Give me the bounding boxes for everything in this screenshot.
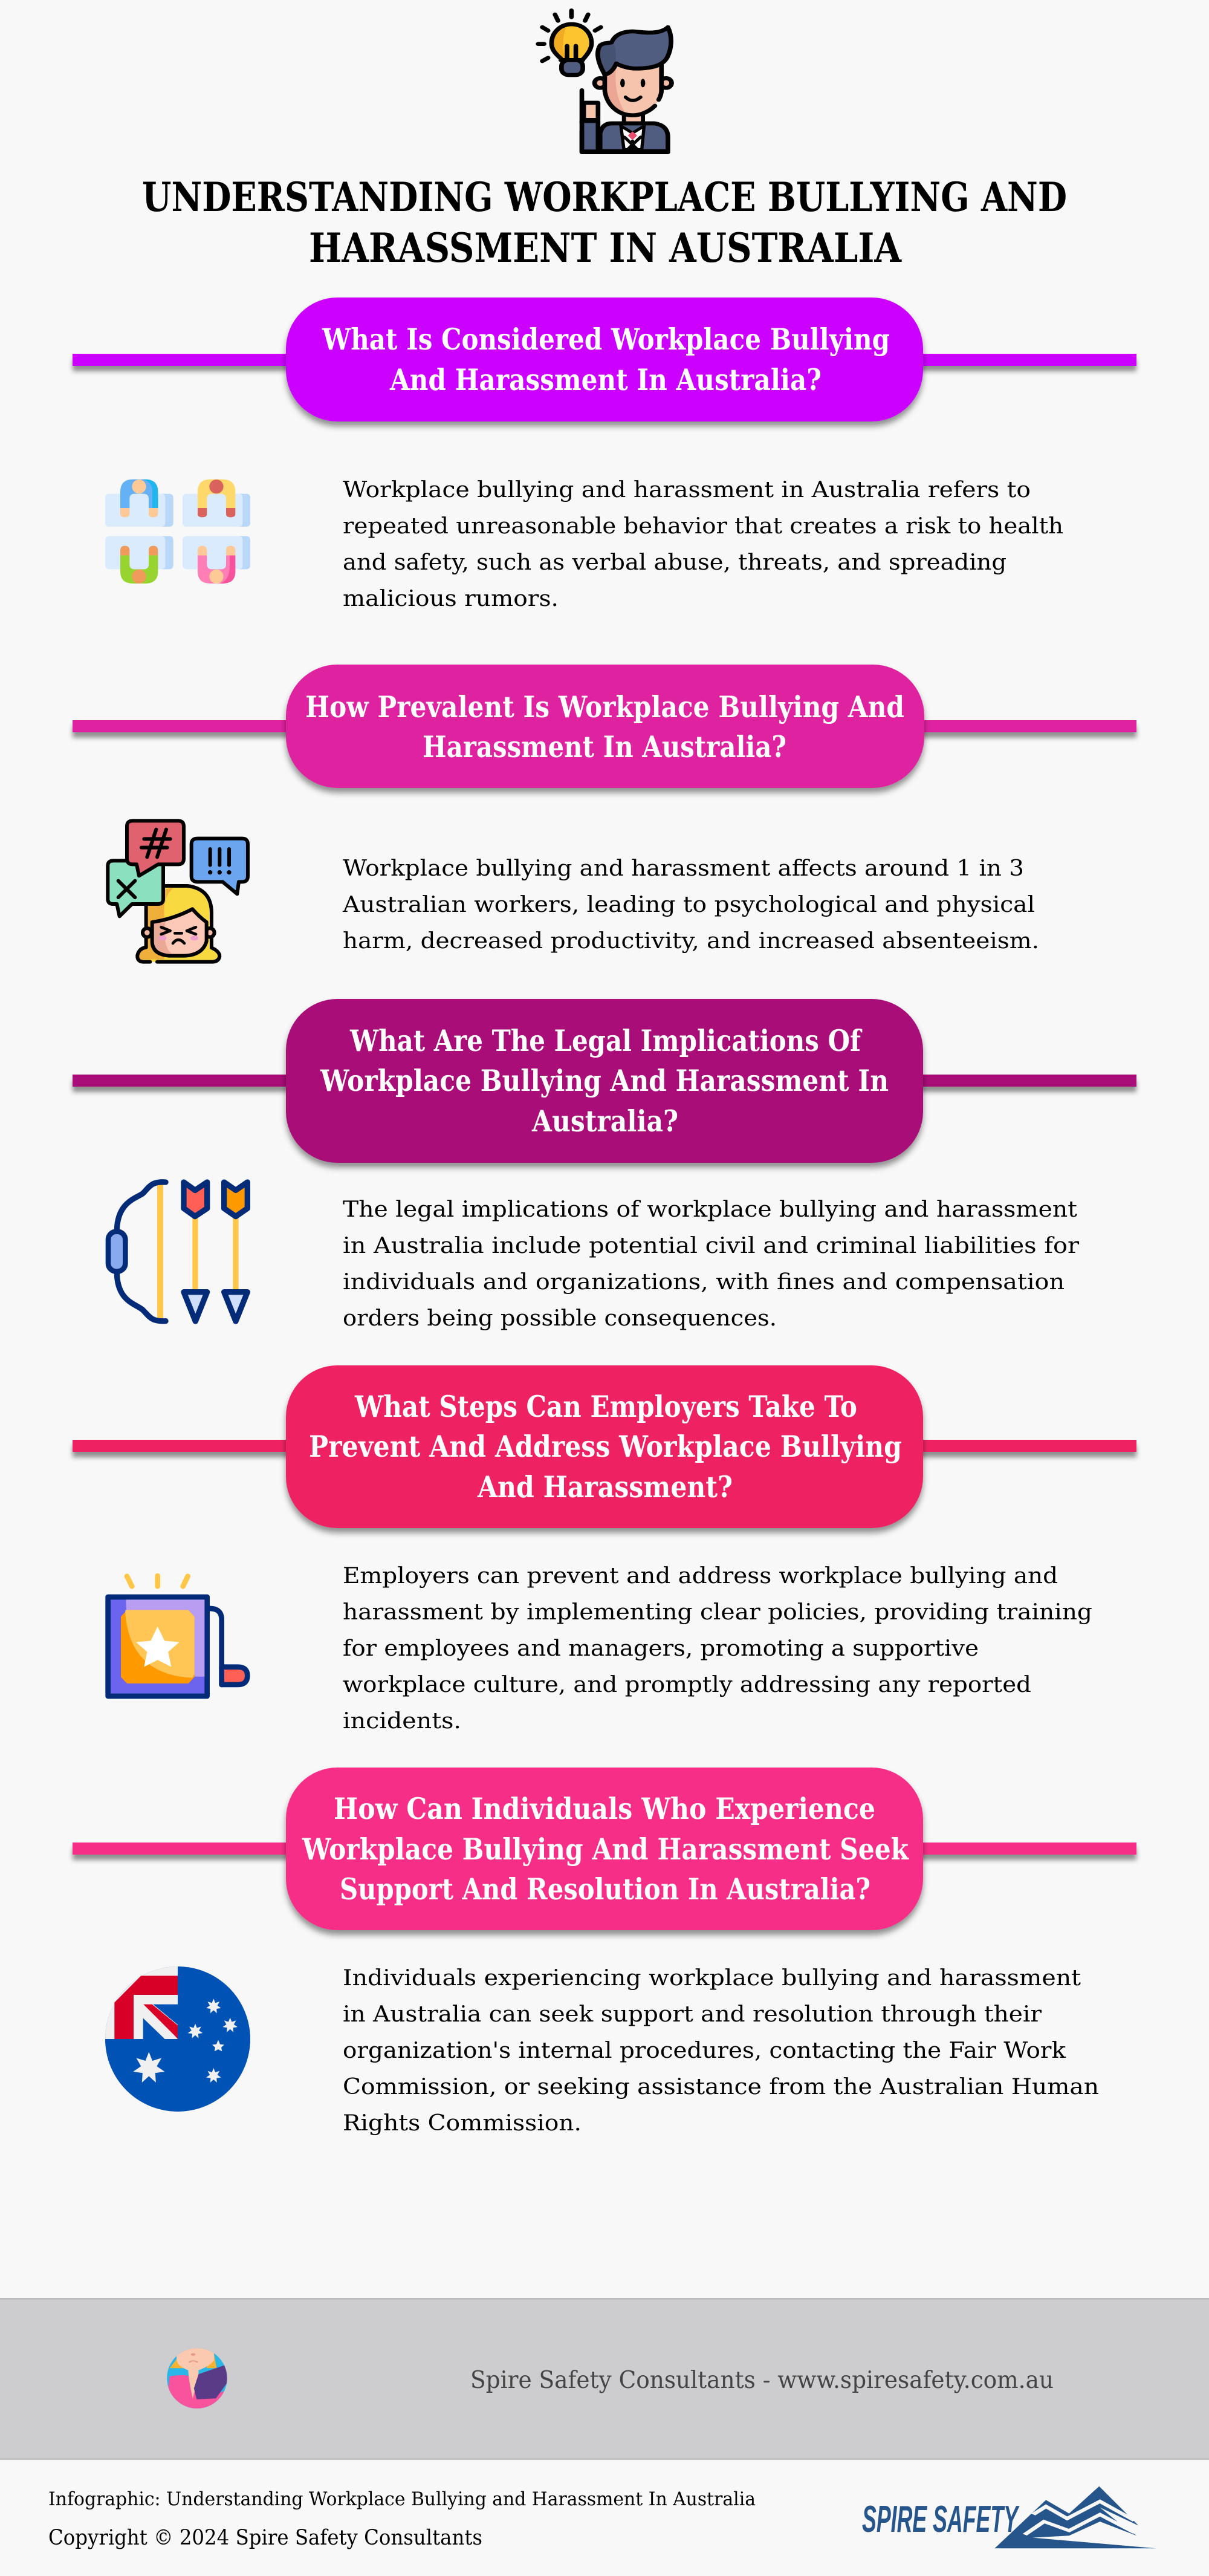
section 2 body text — [342, 856, 1039, 954]
section 4 body text: workplace culture, and promptly addressing any reported — [343, 1673, 1031, 1697]
section 1 heading banner: What Is Considered Workplace Bullying — [322, 322, 890, 357]
icon: bow and arrows — [108, 1182, 247, 1321]
section 5 heading banner: Support And Resolution In Australia? — [340, 1872, 870, 1907]
section 5 body text — [343, 1966, 1099, 2136]
section 3 heading banner: What Are The Legal Implications Of — [349, 1023, 862, 1058]
icon: businessman with light bulb — [538, 10, 672, 152]
icon: distressed woman oval — [166, 2348, 227, 2410]
icon: Australian flag — [105, 1966, 250, 2112]
section 4 heading banner — [73, 1365, 1136, 1528]
footer contact text: Spire Safety Consultants - www.spiresafety.com.au — [470, 2367, 1054, 2394]
section 1 body text: malicious rumors. — [343, 587, 559, 611]
section 4 heading banner: What Steps Can Employers Take To — [354, 1389, 857, 1424]
section 5 body text: Commission, or seeking assistance from the Australian Human — [343, 2075, 1099, 2100]
section 4 body text: incidents. — [343, 1709, 461, 1734]
section 4 body text: Employers can prevent and address workplace bullying and — [343, 1564, 1058, 1589]
section 3 body text — [343, 1197, 1080, 1331]
section 2 heading banner: Harassment In Australia? — [423, 729, 786, 764]
icon: award box with star — [108, 1576, 247, 1696]
copyright: Copyright © 2024 Spire Safety Consultants — [48, 2526, 482, 2550]
section 2 body text: Workplace bullying and harassment affects around 1 in 3 — [343, 856, 1024, 881]
section 5 body text: in Australia can seek support and resolution through their — [343, 2002, 1042, 2027]
title — [142, 174, 1067, 272]
section 3 heading banner: Australia? — [531, 1104, 678, 1139]
icon: upset woman with speech bubbles — [108, 821, 248, 962]
section 4 body text: for employees and managers, promoting a supportive — [343, 1636, 979, 1661]
section 5 body text: organization's internal procedures, contacting the Fair Work — [343, 2038, 1066, 2063]
infographic credit: Infographic: Understanding Workplace Bullying and Harassment In Australia — [48, 2488, 756, 2510]
section 5 heading banner: Workplace Bullying And Harassment Seek — [302, 1832, 909, 1867]
section 3 heading banner: Workplace Bullying And Harassment In — [320, 1063, 889, 1098]
section 2 body text: harm, decreased productivity, and increased absenteeism. — [343, 929, 1039, 954]
section 1 heading banner — [73, 298, 1136, 421]
section 4 body text — [343, 1564, 1092, 1734]
section 5 body text: Individuals experiencing workplace bullying and harassment — [343, 1966, 1081, 1991]
section 1 body text: and safety, such as verbal abuse, threats, and spreading — [343, 550, 1006, 575]
section 3 body text: in Australia include potential civil and criminal liabilities for — [343, 1234, 1080, 1258]
section 4 heading banner: And Harassment? — [477, 1469, 733, 1504]
footer band — [0, 2298, 1209, 2460]
section 3 body text: individuals and organizations, with fines and compensation — [343, 1270, 1065, 1295]
section 1 body text: repeated unreasonable behavior that creates a risk to health — [343, 514, 1063, 539]
section 2 heading banner — [73, 665, 1136, 788]
section 5 body text: Rights Commission. — [343, 2111, 582, 2136]
title: HARASSMENT IN AUSTRALIA — [309, 224, 902, 272]
section 5 heading banner — [73, 1768, 1136, 1930]
section 3 body text: The legal implications of workplace bullying and harassment — [343, 1197, 1078, 1222]
logo: Spire Safety — [862, 2487, 1156, 2548]
section 5 heading banner: How Can Individuals Who Experience — [334, 1791, 875, 1826]
icon: people at desks — [105, 480, 250, 584]
section 1 heading banner: And Harassment In Australia? — [389, 362, 822, 397]
section 1 body text: Workplace bullying and harassment in Australia refers to — [343, 478, 1031, 503]
section 2 heading banner: How Prevalent Is Workplace Bullying And — [305, 689, 904, 724]
section 3 heading banner — [73, 999, 1136, 1163]
section 3 body text: orders being possible consequences. — [343, 1306, 777, 1331]
section 4 body text: harassment by implementing clear policies, providing training — [343, 1600, 1092, 1625]
title: UNDERSTANDING WORKPLACE BULLYING AND — [142, 174, 1067, 221]
section 1 body text — [343, 478, 1063, 611]
logo: Spire Safety: SPIRE SAFETY — [862, 2499, 1020, 2540]
section 4 heading banner: Prevent And Address Workplace Bullying — [309, 1429, 902, 1464]
section 2 body text: Australian workers, leading to psychological and physical — [342, 893, 1035, 917]
